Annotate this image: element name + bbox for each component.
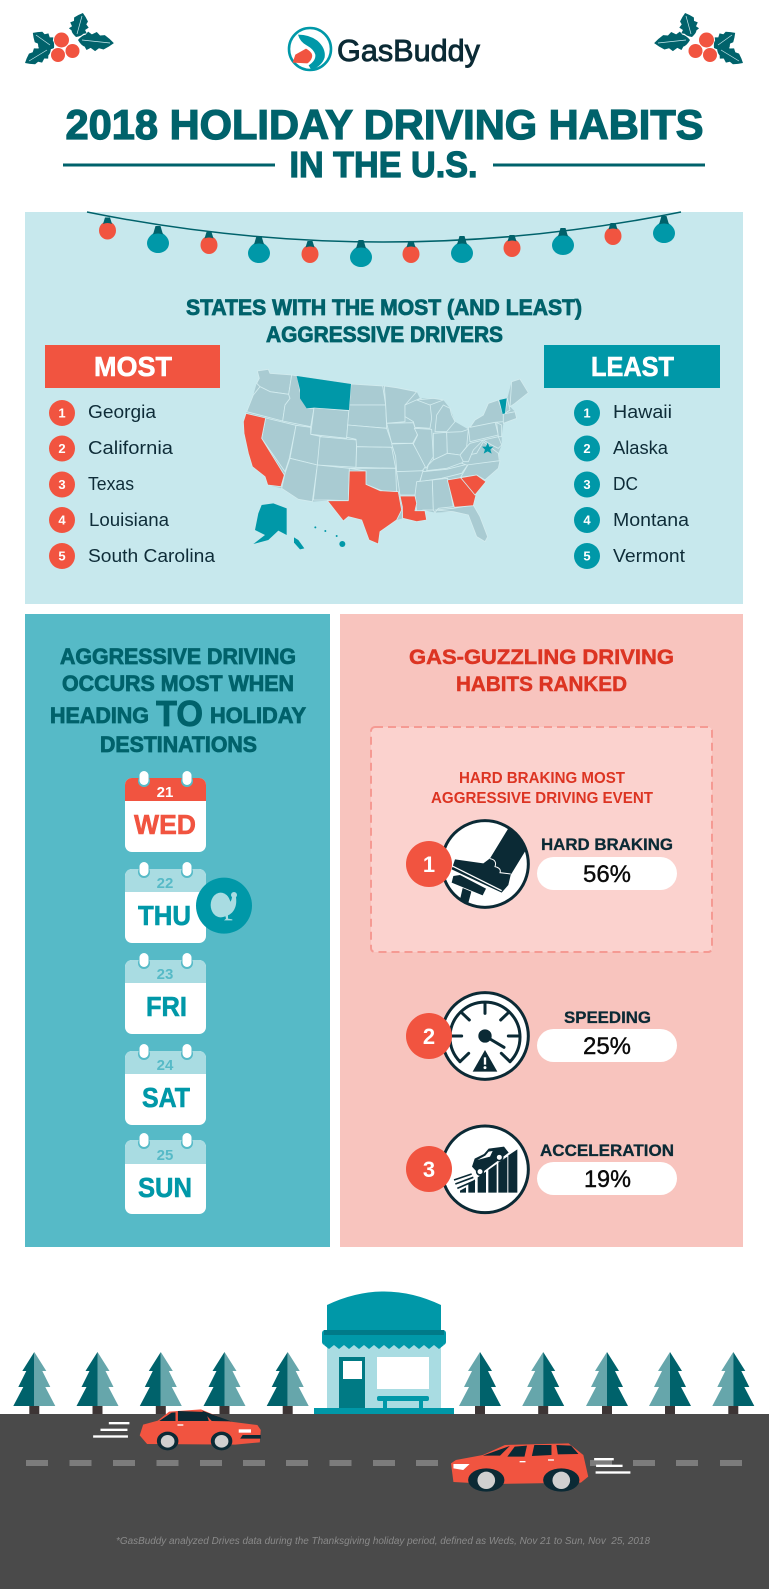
string of lights <box>87 212 681 267</box>
car: red SUV <box>451 1443 630 1492</box>
heading: gas-guzzling: GAS-GUZZLING DRIVING <box>409 645 674 669</box>
calendar: Thu 22: THU <box>138 900 191 931</box>
least list: LEAST <box>591 351 674 382</box>
most list: South Carolina <box>88 546 216 566</box>
icon: turkey <box>196 878 252 934</box>
least list: 1 <box>583 406 591 420</box>
most list: Louisiana <box>89 510 170 530</box>
car: red sedan <box>93 1409 261 1450</box>
gas station building <box>314 1292 454 1414</box>
most list: 5 <box>58 548 66 564</box>
calendar: Wed 21: WED <box>134 809 196 840</box>
calendar: Thu 22: 22 <box>157 875 173 892</box>
most list: MOST <box>94 351 172 382</box>
least list: Hawaii <box>613 402 672 422</box>
habit 1: hard braking: HARD BRAKING <box>541 835 673 854</box>
rank badge 2 <box>406 1013 452 1059</box>
calendar: Sat 24: 24 <box>157 1057 174 1074</box>
calendar: Sun 25 <box>125 1133 206 1214</box>
callout: hard braking box: AGGRESSIVE DRIVING EVENT <box>431 790 653 807</box>
calendar: Fri 23: 23 <box>157 966 173 983</box>
road <box>0 1414 769 1589</box>
logo: GasBuddy: GasBuddy <box>337 33 480 68</box>
least list: 5 <box>583 548 591 564</box>
least list: Vermont <box>613 546 685 566</box>
title <box>63 101 705 185</box>
calendar: Sat 24: SAT <box>142 1082 190 1113</box>
least list: DC <box>613 474 638 494</box>
heading: aggressive driving <box>50 644 306 757</box>
calendar: Sat 24 <box>125 1044 206 1125</box>
icon: car on incline <box>442 1126 528 1213</box>
panel: states <box>25 212 743 604</box>
calendar: Sun 25: 25 <box>157 1147 173 1164</box>
least list: 4 <box>583 512 591 528</box>
heading: aggressive driving: HEADING <box>50 703 149 728</box>
most list: 2 <box>58 441 66 456</box>
most list: 3 <box>58 477 66 492</box>
icon: holly left <box>21 10 115 70</box>
calendar: Wed 21 <box>125 771 206 852</box>
least list: Montana <box>613 510 690 530</box>
heading: aggressive driving: DESTINATIONS <box>100 732 257 757</box>
habit 3: acceleration: ACCELERATION <box>540 1141 674 1160</box>
rank badge 3 <box>406 1146 452 1192</box>
calendar: Wed 21: 21 <box>157 784 173 801</box>
habit 3: acceleration <box>406 1126 677 1213</box>
rank badge 3: 3 <box>423 1157 435 1182</box>
panel: aggressive driving days <box>25 614 330 1247</box>
callout: hard braking box: HARD BRAKING MOST <box>459 770 625 787</box>
heading: gas-guzzling <box>409 645 674 696</box>
calendar: Fri 23 <box>125 953 206 1034</box>
heading: aggressive driving: AGGRESSIVE DRIVING <box>60 644 296 669</box>
trees <box>13 1352 754 1414</box>
heading: states: STATES WITH THE MOST (AND LEAST) <box>186 295 582 320</box>
callout: hard braking box <box>371 727 712 952</box>
most list: Texas <box>88 474 134 494</box>
least list <box>544 345 720 569</box>
title: IN THE U.S. <box>290 144 478 185</box>
most list <box>45 345 220 569</box>
calendar: Fri 23: FRI <box>146 991 187 1022</box>
most list: Georgia <box>88 402 157 422</box>
habit 2: speeding <box>406 993 677 1079</box>
habit 1: hard braking: 56% <box>583 861 631 888</box>
panel: gas-guzzling habits <box>340 614 743 1247</box>
most list: 4 <box>58 512 66 528</box>
title: 2018 HOLIDAY DRIVING HABITS <box>66 101 704 148</box>
road dashes <box>26 1460 742 1466</box>
heading: aggressive driving: TO <box>156 693 203 734</box>
icon: speedometer <box>442 993 528 1079</box>
heading: states <box>186 295 582 347</box>
heading: gas-guzzling: HABITS RANKED <box>456 672 627 696</box>
heading: states: AGGRESSIVE DRIVERS <box>266 322 503 347</box>
rank badge 2: 2 <box>423 1024 435 1049</box>
habit 3: acceleration: 19% <box>584 1166 631 1193</box>
most list: California <box>88 438 174 458</box>
heading: aggressive driving: OCCURS MOST WHEN <box>62 671 294 696</box>
habit 2: speeding: SPEEDING <box>564 1008 651 1027</box>
calendar: Thu 22 <box>125 862 206 943</box>
most list: 1 <box>58 406 66 420</box>
footnote: *GasBuddy analyzed Drives data during the Thanksgiving holiday period, defined as Weds, Nov 21 to Sun, Nov 25, 2018 <box>116 1536 650 1547</box>
icon: holly right <box>653 10 747 70</box>
rank badge 1: 1 <box>423 852 435 877</box>
heading: aggressive driving: HOLIDAY <box>210 703 306 728</box>
habit 2: speeding: 25% <box>583 1033 631 1060</box>
rank badge 1 <box>406 841 452 887</box>
least list: 3 <box>583 477 591 492</box>
icon: foot on brake <box>442 821 530 907</box>
calendar: Sun 25: SUN <box>138 1172 192 1203</box>
map: USA <box>243 369 528 549</box>
least list: 2 <box>583 441 591 456</box>
habit 1: hard braking <box>406 821 677 907</box>
least list: Alaska <box>613 438 669 458</box>
logo: GasBuddy <box>289 28 480 70</box>
